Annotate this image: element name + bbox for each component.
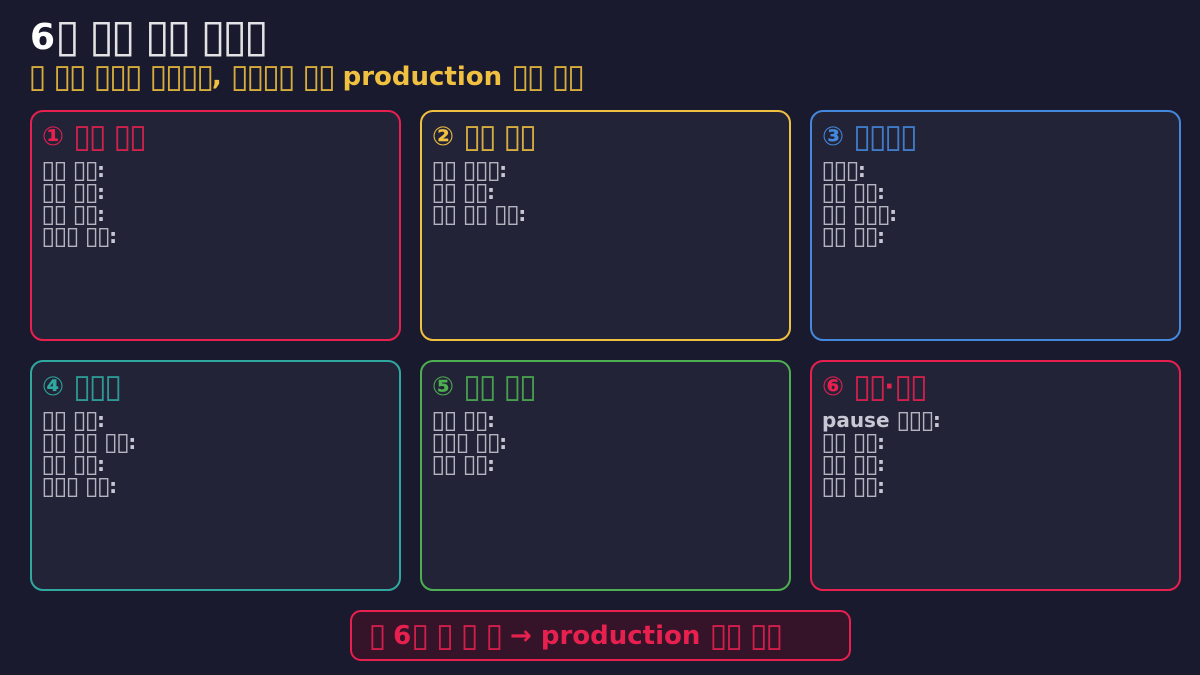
- card 2 heading: ② ▯▯ ▯▯: [432, 117, 535, 155]
- card 1 items: ▯▯ ▯▯:: [42, 199, 105, 228]
- card 1 items: [42, 155, 117, 250]
- card 5 items: ▯▯ ▯▯:: [432, 405, 495, 434]
- panel: card 6: [811, 361, 1180, 590]
- callout text: ▯ 6▯ ▯ ▯ ▯ → production ▯▯ ▯▯: [368, 616, 781, 654]
- card 3 items: ▯▯▯:: [822, 155, 866, 184]
- card 3 items: ▯▯ ▯▯:: [822, 177, 885, 206]
- card 2 items: ▯▯ ▯▯ ▯▯:: [432, 199, 526, 228]
- callout: [351, 611, 850, 660]
- card 1 heading: ① ▯▯ ▯▯: [42, 117, 145, 155]
- card 3 heading: ③ ▯▯▯▯: [822, 117, 916, 155]
- panel: card 3: [811, 111, 1180, 340]
- card 1 items: ▯▯ ▯▯:: [42, 155, 105, 184]
- card 4 items: ▯▯▯ ▯▯:: [42, 471, 117, 500]
- panel: card 4: [31, 361, 400, 590]
- title: 6▯ ▯▯ ▯▯ ▯▯▯: [30, 9, 266, 62]
- card 4 items: ▯▯ ▯▯ ▯▯:: [42, 427, 136, 456]
- card 2 items: ▯▯ ▯▯▯:: [432, 155, 507, 184]
- card 6 items: pause ▯▯▯:: [822, 405, 941, 434]
- card 6 items: ▯▯ ▯▯:: [822, 471, 885, 500]
- card 6 heading: ⑥ ▯▯·▯▯: [822, 367, 925, 405]
- card 4 items: ▯▯ ▯▯:: [42, 449, 105, 478]
- panel: card 1: [31, 111, 400, 340]
- card 5 items: [432, 405, 507, 478]
- panel: card 5: [421, 361, 790, 590]
- card 6 items: [822, 405, 941, 500]
- card 1 items: ▯▯ ▯▯:: [42, 177, 105, 206]
- card 5 items: ▯▯ ▯▯:: [432, 449, 495, 478]
- subtitle: ▯ ▯▯ ▯▯▯ ▯▯▯▯, ▯▯▯▯ ▯▯ production ▯▯ ▯▯: [28, 57, 583, 95]
- card 2 items: [432, 155, 526, 228]
- card 4 items: ▯▯ ▯▯:: [42, 405, 105, 434]
- card 3 items: ▯▯ ▯▯:: [822, 221, 885, 250]
- card 1 items: ▯▯▯ ▯▯:: [42, 221, 117, 250]
- panel: card 2: [421, 111, 790, 340]
- card 5 items: ▯▯▯ ▯▯:: [432, 427, 507, 456]
- card 4 items: [42, 405, 136, 500]
- card 6 items: ▯▯ ▯▯:: [822, 427, 885, 456]
- card 5 heading: ⑤ ▯▯ ▯▯: [432, 367, 535, 405]
- card 3 items: [822, 155, 897, 250]
- card 4 heading: ④ ▯▯▯: [42, 367, 120, 405]
- card 2 items: ▯▯ ▯▯:: [432, 177, 495, 206]
- card 6 items: ▯▯ ▯▯:: [822, 449, 885, 478]
- card 3 items: ▯▯ ▯▯▯:: [822, 199, 897, 228]
